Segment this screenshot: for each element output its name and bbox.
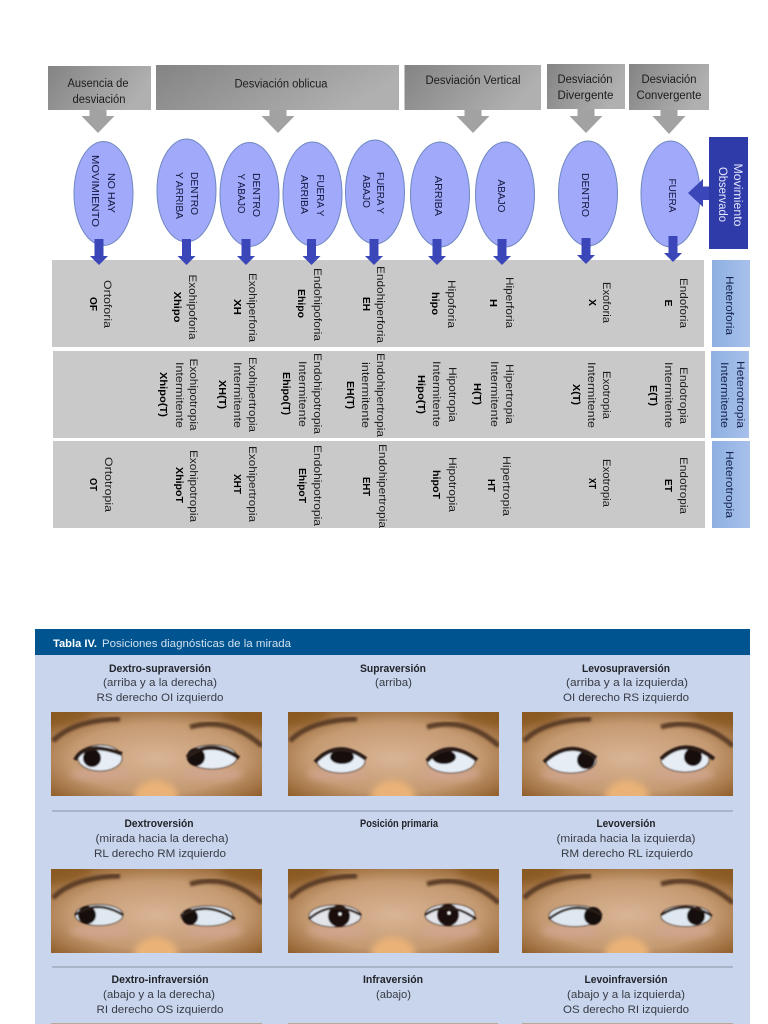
caption: Dextroversión: Dextroversión	[124, 818, 194, 830]
cell: Ortotropia OT: Ortotropia	[102, 457, 114, 513]
caption: Levoversión: Levoversión	[596, 818, 656, 830]
caption: Dextro-supraversión: (arriba y a la derecha)	[103, 677, 217, 689]
header box: Desviación Vertical: Desviación Vertical	[426, 75, 520, 87]
cell: Exohipertropia XHT	[231, 446, 258, 523]
cell: Endohipotropia EhipoT: EhipoT	[296, 468, 308, 504]
cell: Exohipertropia XHT: Exohipertropia	[246, 446, 258, 523]
caption: Levosupraversión: OI derecho RS izquierdo	[563, 692, 689, 704]
row label: Heterotropia	[712, 441, 750, 528]
oval: Abajo	[476, 142, 534, 247]
cell: Endotropia intermitente	[647, 362, 689, 428]
panel: row Heterotropia	[53, 441, 705, 529]
caption: Dextro-infraversión: (abajo y a la derecha)	[103, 989, 215, 1001]
cell: Hipoforia hipo: hipo	[429, 292, 441, 315]
header box: Desviación Divergente	[547, 64, 625, 109]
side box: Movimiento Observado	[709, 137, 748, 249]
cell: Exotropia XT: Exotropia	[600, 459, 612, 508]
cell: Endohipertropia intermitente	[344, 353, 386, 438]
cell: Exohipotropia XhipoT: XhipoT	[173, 467, 185, 504]
oval: No hay movimiento	[74, 142, 133, 246]
gray arrows from headers to ovals	[82, 109, 686, 134]
cell: Hipotropia intermitente	[415, 361, 458, 427]
header box: Desviación Convergente: Desviación	[642, 74, 696, 86]
cell: Hipertropia HT: HT	[485, 479, 497, 493]
oval: Arriba: ARRIBA	[432, 176, 444, 216]
cell: Endohiperforia EH	[360, 266, 386, 344]
cell: Exohipotropia intermitente: Xhipo(T)	[157, 372, 169, 417]
cell: Ortotropia OT: OT	[87, 478, 99, 492]
cell: Exotropia intermitente	[570, 362, 612, 428]
cell: Exohipertropia intermitente	[216, 357, 258, 433]
cell: Exohipoforia Xhipo	[171, 274, 198, 340]
caption: Levoinfraversión: Levoinfraversión	[584, 974, 668, 986]
caption: Supraversión	[360, 663, 426, 689]
oval: Dentro y abajo	[220, 142, 279, 246]
cell: Endohipoforia Ehipo: Ehipo	[295, 289, 307, 318]
oval: No hay movimiento: MOVIMIENTO	[89, 155, 101, 227]
caption: Posición primaria: Posición primaria	[360, 818, 439, 830]
cell: Endohiperforia EH: EH	[360, 297, 372, 311]
cell: Exotropia XT	[586, 459, 612, 508]
oval: Fuera	[641, 141, 700, 247]
cell: Hipotropia hipoT: hipoT	[430, 470, 442, 500]
caption: Infraversión	[363, 974, 423, 1001]
caption: Levosupraversión: Levosupraversión	[582, 663, 670, 675]
row label: Heterotropia intermitente	[711, 351, 749, 438]
header box: Desviación Divergente: Divergente	[558, 90, 614, 102]
oval: Arriba	[410, 142, 470, 247]
cell: Hiperforia H: H	[487, 299, 499, 307]
oval: Fuera y abajo: FUERA Y	[374, 172, 386, 214]
row label: Heteroforia: Heteroforia	[723, 276, 735, 336]
cell: Endohipoforia Ehipo: Endohipoforia	[311, 268, 323, 342]
cell: Endohipertropia intermitente: intermitente	[359, 362, 371, 428]
cell: Endohipertropia intermitente: Endohipertropia	[374, 353, 386, 438]
caption: Dextroversión: RL derecho RM izquierdo	[94, 848, 226, 860]
photo: eyes up and left	[522, 712, 733, 796]
cell: Exoforia X: Exoforia	[600, 282, 612, 324]
cell: Endohipotropia EhipoT	[296, 445, 323, 527]
header box: Desviación Convergente	[629, 64, 709, 110]
oval: Dentro y arriba: DENTRO	[188, 172, 200, 215]
caption: Levoinfraversión: OS derecho RI izquierdo	[563, 1004, 689, 1016]
cell: Exohipertropia XHT: XHT	[231, 474, 243, 495]
header box: Ausencia de desviación	[48, 66, 151, 110]
cell: Exohipotropia XhipoT	[173, 450, 199, 523]
oval: Fuera y arriba	[283, 142, 342, 246]
table header band: Posiciones diagnósticas de la mirada	[102, 638, 292, 650]
caption: Dextro-supraversión: RS derecho OI izquierdo	[96, 692, 224, 704]
header box: Desviación Divergente: Desviación	[558, 74, 612, 86]
cell: Exohipertropia intermitente: Intermitente	[231, 362, 243, 428]
cell: Endotropia intermitente: Intermitente	[662, 362, 674, 428]
panel: row Heteroforia	[52, 260, 704, 347]
cell: Endohipertropia EHT: Endohipertropia	[376, 444, 388, 529]
side box: Movimiento Observado: Movimiento	[731, 164, 743, 226]
row label: Heterotropia: Heterotropia	[723, 451, 735, 519]
header box: Ausencia de desviación: Ausencia de	[68, 78, 128, 90]
caption: Dextro-infraversión: Dextro-infraversión	[112, 974, 209, 986]
oval: Fuera y arriba: FUERA Y	[314, 174, 326, 216]
photo: eyes right	[51, 869, 262, 953]
cell: Exoforia X: X	[586, 299, 598, 306]
cell: Endoforia E: Endoforia	[677, 278, 689, 329]
cell: Hipertropia HT: Hipertropia	[500, 456, 512, 517]
caption: Dextroversión	[94, 818, 228, 860]
cell: Hipoforia hipo	[429, 280, 457, 329]
cell: Exohipotropia intermitente	[157, 358, 199, 431]
row label: Heterotropia intermitente: Heterotropia	[734, 361, 746, 429]
header box: Desviación oblicua: Desviación oblicua	[234, 78, 328, 90]
header box: Desviación Convergente: Convergente	[636, 90, 702, 102]
cell: Endohipotropia intermitente: Endohipotropia	[311, 353, 323, 435]
cell: Ortotropia OT	[87, 457, 114, 513]
cell: Exohipoforia Xhipo: Exohipoforia	[186, 274, 198, 340]
cell: Endohipotropia EhipoT: Endohipotropia	[311, 445, 323, 527]
cell: Ortoforia OF: Ortoforia	[101, 280, 113, 329]
cell: Hipotropia intermitente: Intermitente	[430, 361, 442, 427]
oval: Fuera y arriba: ARRIBA	[298, 175, 310, 214]
cell: Exotropia intermitente: Intermitente	[585, 362, 597, 428]
side box: Movimiento Observado: Observado	[716, 167, 728, 222]
cell: Endohipertropia EHT	[360, 444, 388, 529]
caption: Supraversión: (arriba)	[375, 677, 412, 689]
caption: Infraversión: (abajo)	[376, 989, 411, 1001]
oval: Dentro	[558, 141, 618, 246]
caption: Infraversión: Infraversión	[363, 974, 423, 986]
cell: Exotropia intermitente: X(T)	[570, 384, 582, 405]
cell: Endohipotropia intermitente: Ehipo(T)	[280, 372, 292, 415]
oval: Fuera y abajo: ABAJO	[360, 175, 372, 208]
cell: Endohipertropia intermitente: EH(T)	[344, 381, 356, 409]
cell: Endohipotropia intermitente	[280, 353, 323, 435]
photo: eyes up	[288, 712, 499, 796]
oval: Dentro y arriba: Y ARRIBA	[173, 172, 185, 219]
cell: Hipertropia intermitente	[471, 361, 515, 427]
cell: Hipoforia hipo: Hipoforia	[445, 280, 457, 329]
table header band: Tabla IV.	[53, 638, 97, 650]
header box: Desviación oblicua	[156, 65, 399, 110]
header box: Ausencia de desviación: desviación	[72, 94, 126, 106]
oval: No hay movimiento: NO HAY	[105, 173, 117, 213]
oval: Dentro y abajo: DENTRO	[250, 173, 262, 217]
photo: eyes up and right	[51, 712, 262, 796]
oval: Abajo: ABAJO	[495, 180, 507, 212]
caption: Dextro-infraversión	[96, 974, 224, 1016]
caption: Levoinfraversión: (abajo y a la izquierda)	[567, 989, 685, 1001]
cell: Exohipotropia intermitente: Exohipotropia	[187, 358, 199, 431]
cell: Exohipoforia Xhipo: Xhipo	[171, 292, 183, 322]
header box: Desviación Vertical	[404, 65, 541, 110]
cell: Endotropia ET: ET	[662, 479, 674, 493]
cell: Endohipertropia EHT: EHT	[360, 477, 372, 497]
row label: Heterotropia intermitente: Intermitente	[718, 362, 730, 428]
cell: Hipertropia HT	[485, 456, 512, 517]
cell: Endohipotropia intermitente: Intermitente	[296, 361, 308, 427]
caption: Levosupraversión	[563, 663, 689, 704]
oval: Fuera: FUERA	[666, 178, 678, 212]
photo: eyes left	[522, 869, 733, 953]
cell: Ortoforia OF	[87, 280, 113, 329]
tops of the cropped bottom-row photos	[51, 1023, 733, 1024]
panel: Tabla IV	[11, 629, 768, 1024]
cell: Hipotropia intermitente: Hipo(T)	[415, 375, 427, 414]
cell: Exohipotropia intermitente: Intermitente	[173, 362, 185, 428]
arrow: Movimiento Observado to Fuera	[688, 179, 709, 207]
cell: Hipertropia intermitente: H(T)	[471, 383, 483, 405]
cell: Hipertropia intermitente: Hipertropia	[503, 364, 515, 425]
oval: Dentro y abajo: Y ABAJO	[235, 174, 247, 214]
caption: Dextro-supraversión	[96, 663, 224, 704]
cell: Hipertropia intermitente: Intermitente	[488, 361, 500, 427]
oval: Dentro: DENTRO	[579, 173, 591, 217]
caption: Supraversión: Supraversión	[360, 663, 426, 675]
cell: Endotropia intermitente: E(T)	[647, 385, 659, 406]
cell: Hiperforia H: Hiperforia	[503, 277, 515, 329]
cell: Exohiperforia XH: Exohiperforia	[246, 273, 258, 343]
cell: Exotropia XT: XT	[586, 478, 598, 489]
divider	[52, 966, 733, 968]
cell: Endoforia E	[662, 278, 689, 329]
divider	[52, 810, 733, 812]
cell: Endotropia intermitente: Endotropia	[677, 367, 689, 425]
cell: Exohipertropia intermitente: Exohipertropia	[246, 357, 258, 433]
caption: Dextro-supraversión: Dextro-supraversión	[109, 663, 211, 675]
cell: Exoforia X	[586, 282, 612, 324]
row label: Heteroforia	[712, 260, 750, 347]
caption: Levoversión	[556, 818, 696, 860]
table header band	[35, 629, 750, 655]
cell: Exohiperforia XH: XH	[231, 299, 243, 315]
chart: classification of deviations	[48, 64, 750, 529]
panel: row Heterotropia intermitente	[53, 351, 705, 438]
oval: Dentro y arriba	[157, 139, 216, 242]
cell: Endohipoforia Ehipo	[295, 268, 323, 342]
cell: Hipotropia intermitente: Hipotropia	[446, 367, 458, 423]
caption: Dextro-infraversión: RI derecho OS izquierdo	[96, 1004, 224, 1016]
cell: Ortoforia OF: OF	[87, 297, 99, 312]
photo: eyes in primary position	[288, 869, 499, 953]
cell: Hipotropia hipoT: Hipotropia	[446, 457, 458, 513]
oval: Fuera y abajo	[346, 140, 404, 244]
cell: Endotropia ET	[662, 457, 689, 515]
cell: Endotropia ET: Endotropia	[677, 457, 689, 515]
caption: Levoversión: RM derecho RL izquierdo	[561, 848, 693, 860]
caption: Dextroversión: (mirada hacia la derecha)	[96, 833, 228, 845]
cell: Exotropia intermitente: Exotropia	[600, 371, 612, 420]
cell: Endoforia E: E	[662, 300, 674, 306]
cell: Exohipotropia XhipoT: Exohipotropia	[187, 450, 199, 523]
cell: Exohipertropia intermitente: XH(T)	[216, 380, 228, 409]
cell: Hipotropia hipoT	[430, 457, 458, 513]
cell: Exohiperforia XH	[231, 273, 258, 343]
cell: Endohiperforia EH: Endohiperforia	[374, 266, 386, 344]
caption: Levoversión: (mirada hacia la izquierda)	[556, 833, 696, 845]
caption: Levosupraversión: (arriba y a la izquierda)	[566, 677, 688, 689]
cell: Hiperforia H	[487, 277, 515, 329]
blue arrows from ovals to rows	[90, 236, 682, 265]
caption: Levoinfraversión	[563, 974, 689, 1016]
